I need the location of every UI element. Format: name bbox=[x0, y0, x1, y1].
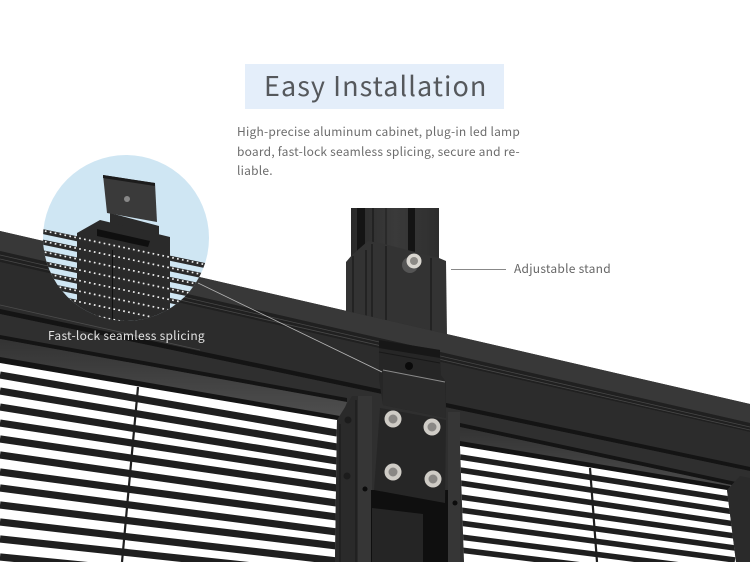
module block bbox=[77, 220, 170, 330]
far right column bbox=[727, 476, 750, 562]
left column bbox=[335, 396, 372, 562]
LED strips bbox=[43, 229, 206, 321]
centre bracket bbox=[374, 340, 446, 503]
description text: board, fast-lock seamless splicing, secure and re- bbox=[237, 143, 520, 160]
icon: post bolt bbox=[402, 254, 422, 273]
mounting plate bbox=[374, 408, 446, 503]
right panel slats bbox=[460, 457, 735, 562]
LED dots bbox=[44, 230, 204, 321]
icon: plate bolts bbox=[384, 410, 442, 488]
label: adjustable stand: Adjustable stand bbox=[514, 260, 611, 277]
leader line: circle to bracket bbox=[198, 283, 382, 372]
description text: High-precise aluminum cabinet, plug-in led lamp bbox=[237, 123, 520, 140]
left rail bbox=[0, 335, 347, 421]
label: fast-lock: Fast-lock seamless splicing bbox=[48, 327, 205, 344]
right LED panel bbox=[460, 446, 736, 562]
window below plate bbox=[371, 490, 448, 562]
beam bbox=[0, 231, 750, 562]
leader line: adjustable stand bbox=[451, 268, 506, 270]
module mounting plate bbox=[103, 175, 159, 240]
description text bbox=[237, 123, 520, 179]
description text: liable. bbox=[237, 162, 273, 179]
right column bbox=[448, 412, 460, 562]
adjustable stand post bbox=[346, 208, 447, 336]
right rail bbox=[460, 423, 750, 500]
detail circle: fast-lock module bbox=[43, 155, 209, 321]
left LED panel bbox=[0, 363, 337, 562]
left panel slats bbox=[0, 375, 337, 562]
title: Easy Installation bbox=[264, 65, 487, 104]
